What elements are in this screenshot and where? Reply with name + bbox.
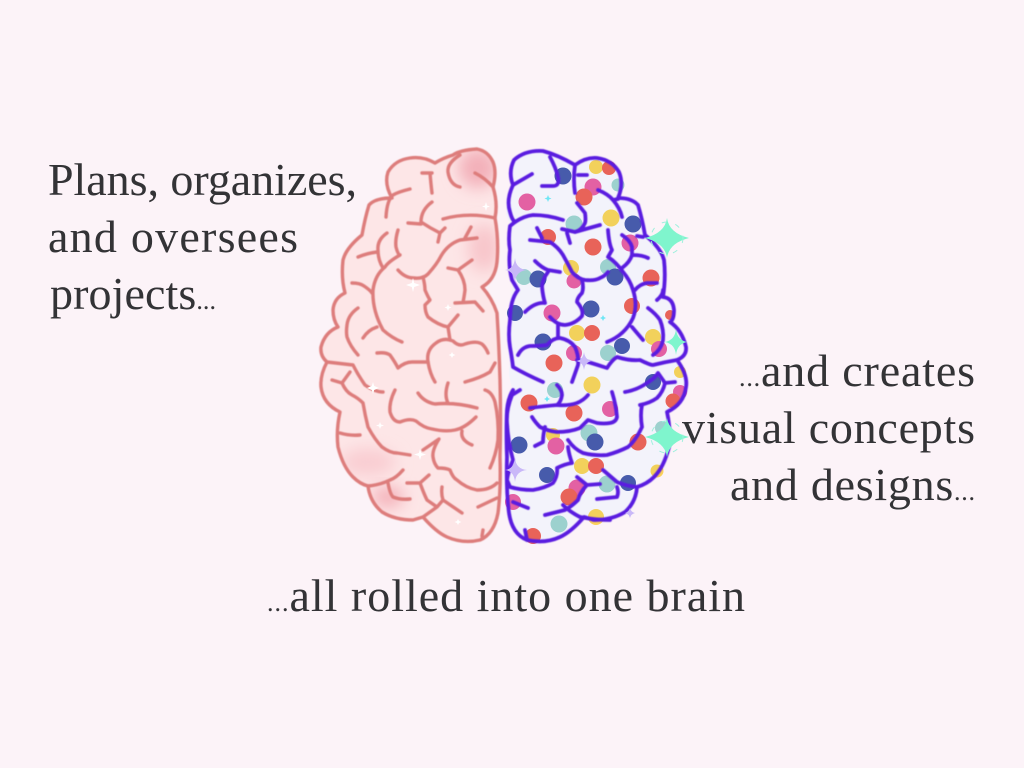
left hemisphere: pink, organised	[321, 148, 500, 541]
sparkle: small mint	[665, 329, 687, 355]
text: and creates visual concepts and designs: ...and creates	[739, 345, 975, 396]
lavender sparkles	[505, 258, 635, 518]
left hemisphere contour lines	[321, 149, 500, 541]
text: plans, organizes, and oversees projects: and oversees	[48, 211, 298, 262]
left hemisphere sparkles	[367, 202, 490, 525]
text: and creates visual concepts and designs: and designs...	[730, 459, 975, 510]
right hemisphere: colourful, creative	[505, 151, 689, 544]
right hemisphere fill	[506, 151, 686, 541]
text: and creates visual concepts and designs: visual concepts	[682, 402, 975, 453]
text: all rolled into one brain: ...all rolled into one brain	[267, 570, 745, 621]
right hemisphere contour lines	[506, 151, 686, 541]
sparkle: large mint top	[645, 218, 689, 258]
text: and creates visual concepts and designs	[682, 345, 975, 510]
text: plans, organizes, and oversees projects: projects...	[50, 268, 216, 319]
brain illustration	[321, 148, 689, 544]
text: plans, organizes, and oversees projects: Plans, organizes,	[48, 154, 357, 205]
tiny cyan sparkles	[544, 195, 606, 402]
left hemisphere fill and watercolor wash	[321, 148, 500, 541]
text: plans, organizes, and oversees projects	[48, 154, 357, 319]
confetti dots	[505, 160, 687, 544]
sparkle: large mint bottom	[645, 418, 689, 457]
